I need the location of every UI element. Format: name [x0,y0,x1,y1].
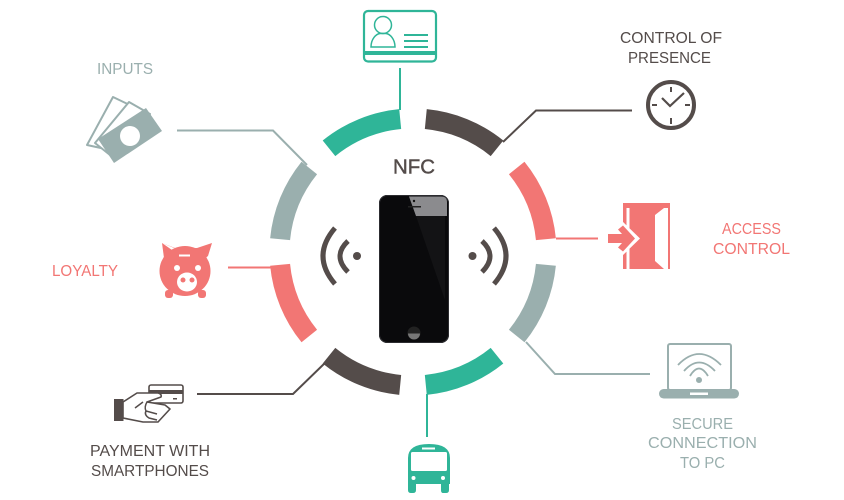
ring segment: bottom dark [329,356,400,385]
connector: secure connection [526,342,650,374]
icon: banknotes [87,97,162,163]
ring segment: left grey [280,168,309,239]
ring segment: left red [280,265,309,336]
connector: access control [556,238,598,240]
connector: ID card [399,68,401,110]
label: control of presence: CONTROL OF [620,30,722,47]
label: access control [713,221,790,258]
label: control of presence [620,30,722,67]
connector: payment [197,361,327,394]
label: secure connection to PC: TO PC [680,455,725,472]
label: access control: ACCESS [722,221,781,238]
connector: control of presence [503,110,632,142]
label: access control: CONTROL [713,241,790,258]
icon: bus [408,444,450,493]
icon: hand with card [114,385,183,422]
heading: NFC: NFC [393,156,435,178]
label: payment with smartphones [90,443,210,480]
phone [379,195,449,343]
label: inputs: INPUTS [97,61,153,78]
label: secure connection to PC: CONNECTION [648,435,757,452]
ring segment: right red [517,168,546,239]
icon: laptop with wifi [659,344,739,398]
connector: inputs [177,130,307,165]
connector: loyalty [228,266,274,268]
label: control of presence: PRESENCE [628,50,711,67]
ring segment: top teal [329,119,400,148]
label: payment with smartphones: SMARTPHONES [91,463,209,480]
NFC waves right [468,228,506,284]
label: loyalty: LOYALTY [52,263,118,280]
label: payment with smartphones: PAYMENT WITH [90,443,210,460]
connector: bus [426,394,428,437]
label: secure connection to PC [648,416,757,472]
icon: piggy bank [160,243,212,298]
icon: clock [648,82,694,128]
icon: ID card [364,11,436,62]
ring segment: right grey [517,265,546,336]
icon: door with arrow [608,203,670,269]
NFC waves left [323,228,361,284]
ring segment: bottom teal [426,356,497,385]
label: secure connection to PC: SECURE [672,416,733,433]
ring segment: top dark [426,119,497,148]
